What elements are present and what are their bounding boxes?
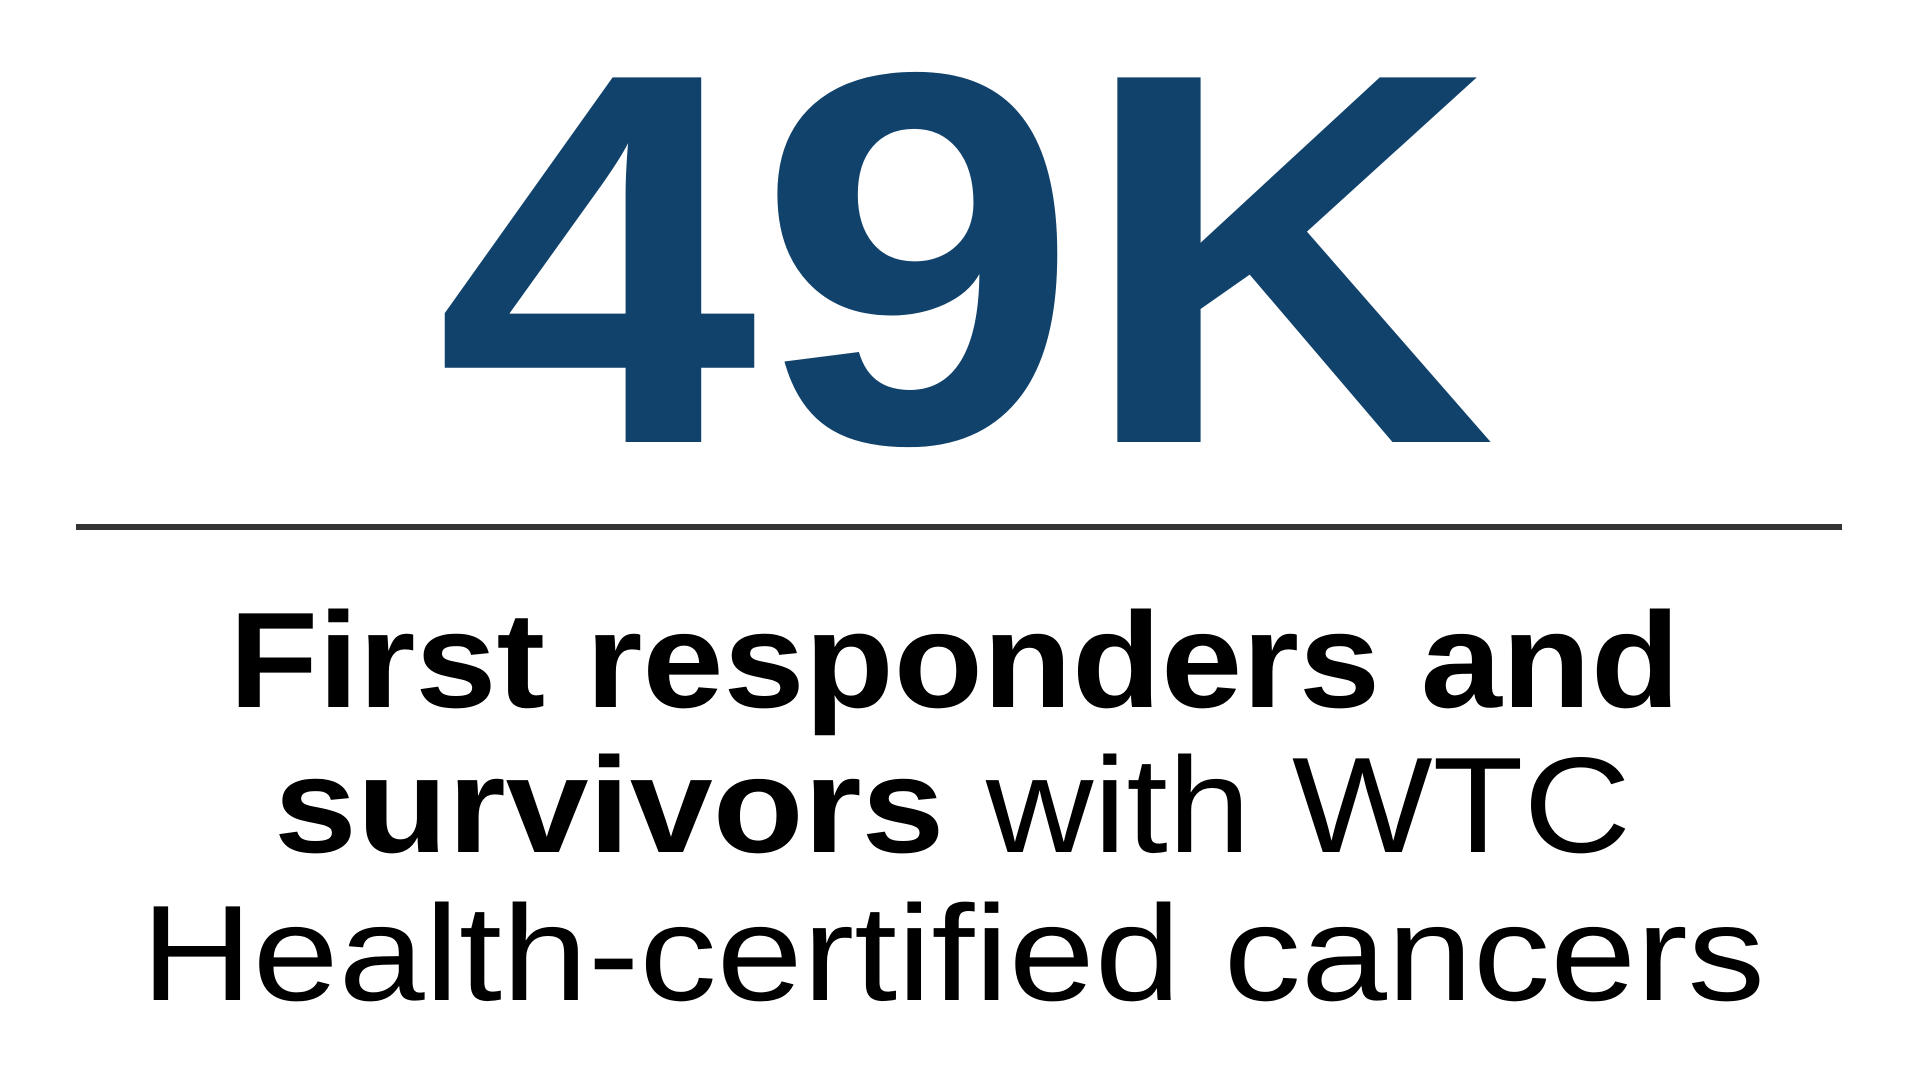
caption text xyxy=(141,584,1765,1029)
caption line 1: First responders and xyxy=(229,584,1680,736)
caption line 2: survivors with WTC xyxy=(274,729,1631,881)
caption line 3: Health-certified cancers xyxy=(141,877,1765,1029)
